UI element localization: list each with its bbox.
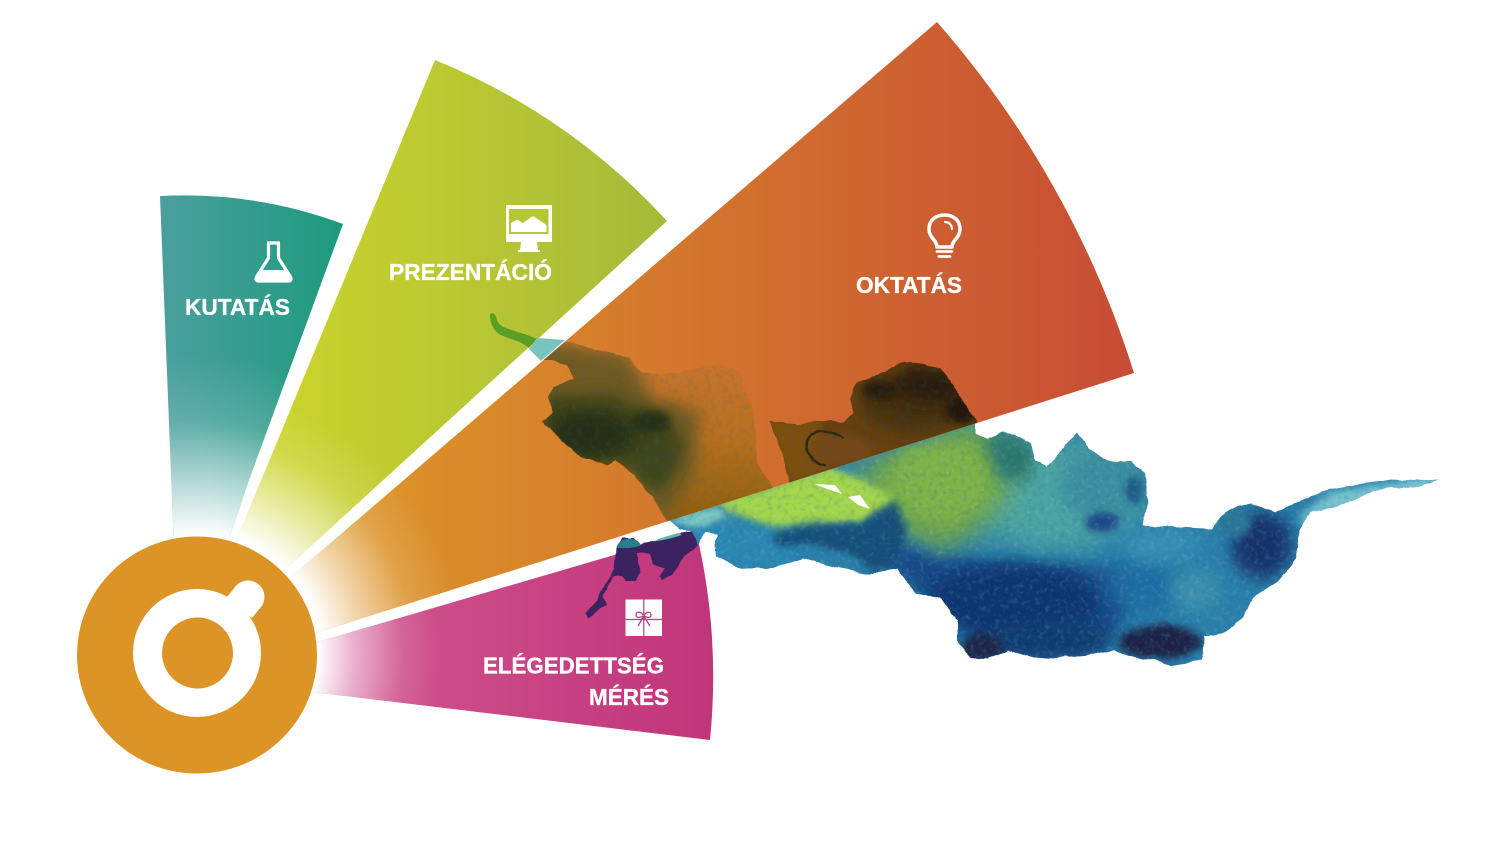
panel: Oktatás wedge (270, 22, 1134, 640)
stain: thin tail on green wedge (490, 313, 537, 348)
label: OKTATÁS: OKTATÁS (856, 271, 962, 298)
panel: Kutatás wedge (160, 195, 343, 600)
stain: white flecks (814, 484, 870, 509)
logo: orange circle with white ring (77, 536, 317, 774)
stain: purple drip on pink wedge (585, 532, 697, 617)
icon: flask (256, 243, 291, 282)
label: ELÉGEDETTSÉG: ELÉGEDETTSÉG (483, 652, 664, 678)
panel: Elégedettség mérés wedge (290, 531, 713, 740)
stain: thin teal line in the gap (654, 533, 682, 541)
stain: light teal across white gap (529, 338, 565, 361)
icon: presentation monitor (506, 205, 552, 252)
stain: brown left lobe on orange (542, 342, 773, 522)
icon: gift box (626, 600, 662, 636)
panel: Prezentáció wedge (222, 60, 667, 600)
stain: brown right lobe on orange (770, 362, 978, 482)
stain: teal cap in the gap (617, 539, 640, 548)
watercolor stain (490, 313, 1460, 680)
label: PREZENTÁCIÓ: PREZENTÁCIÓ (389, 258, 552, 285)
label: KUTATÁS: KUTATÁS (185, 293, 290, 320)
icon: light bulb (929, 215, 960, 256)
label: MÉRÉS: MÉRÉS (589, 683, 669, 710)
stain: blue and green lake (670, 424, 1438, 666)
